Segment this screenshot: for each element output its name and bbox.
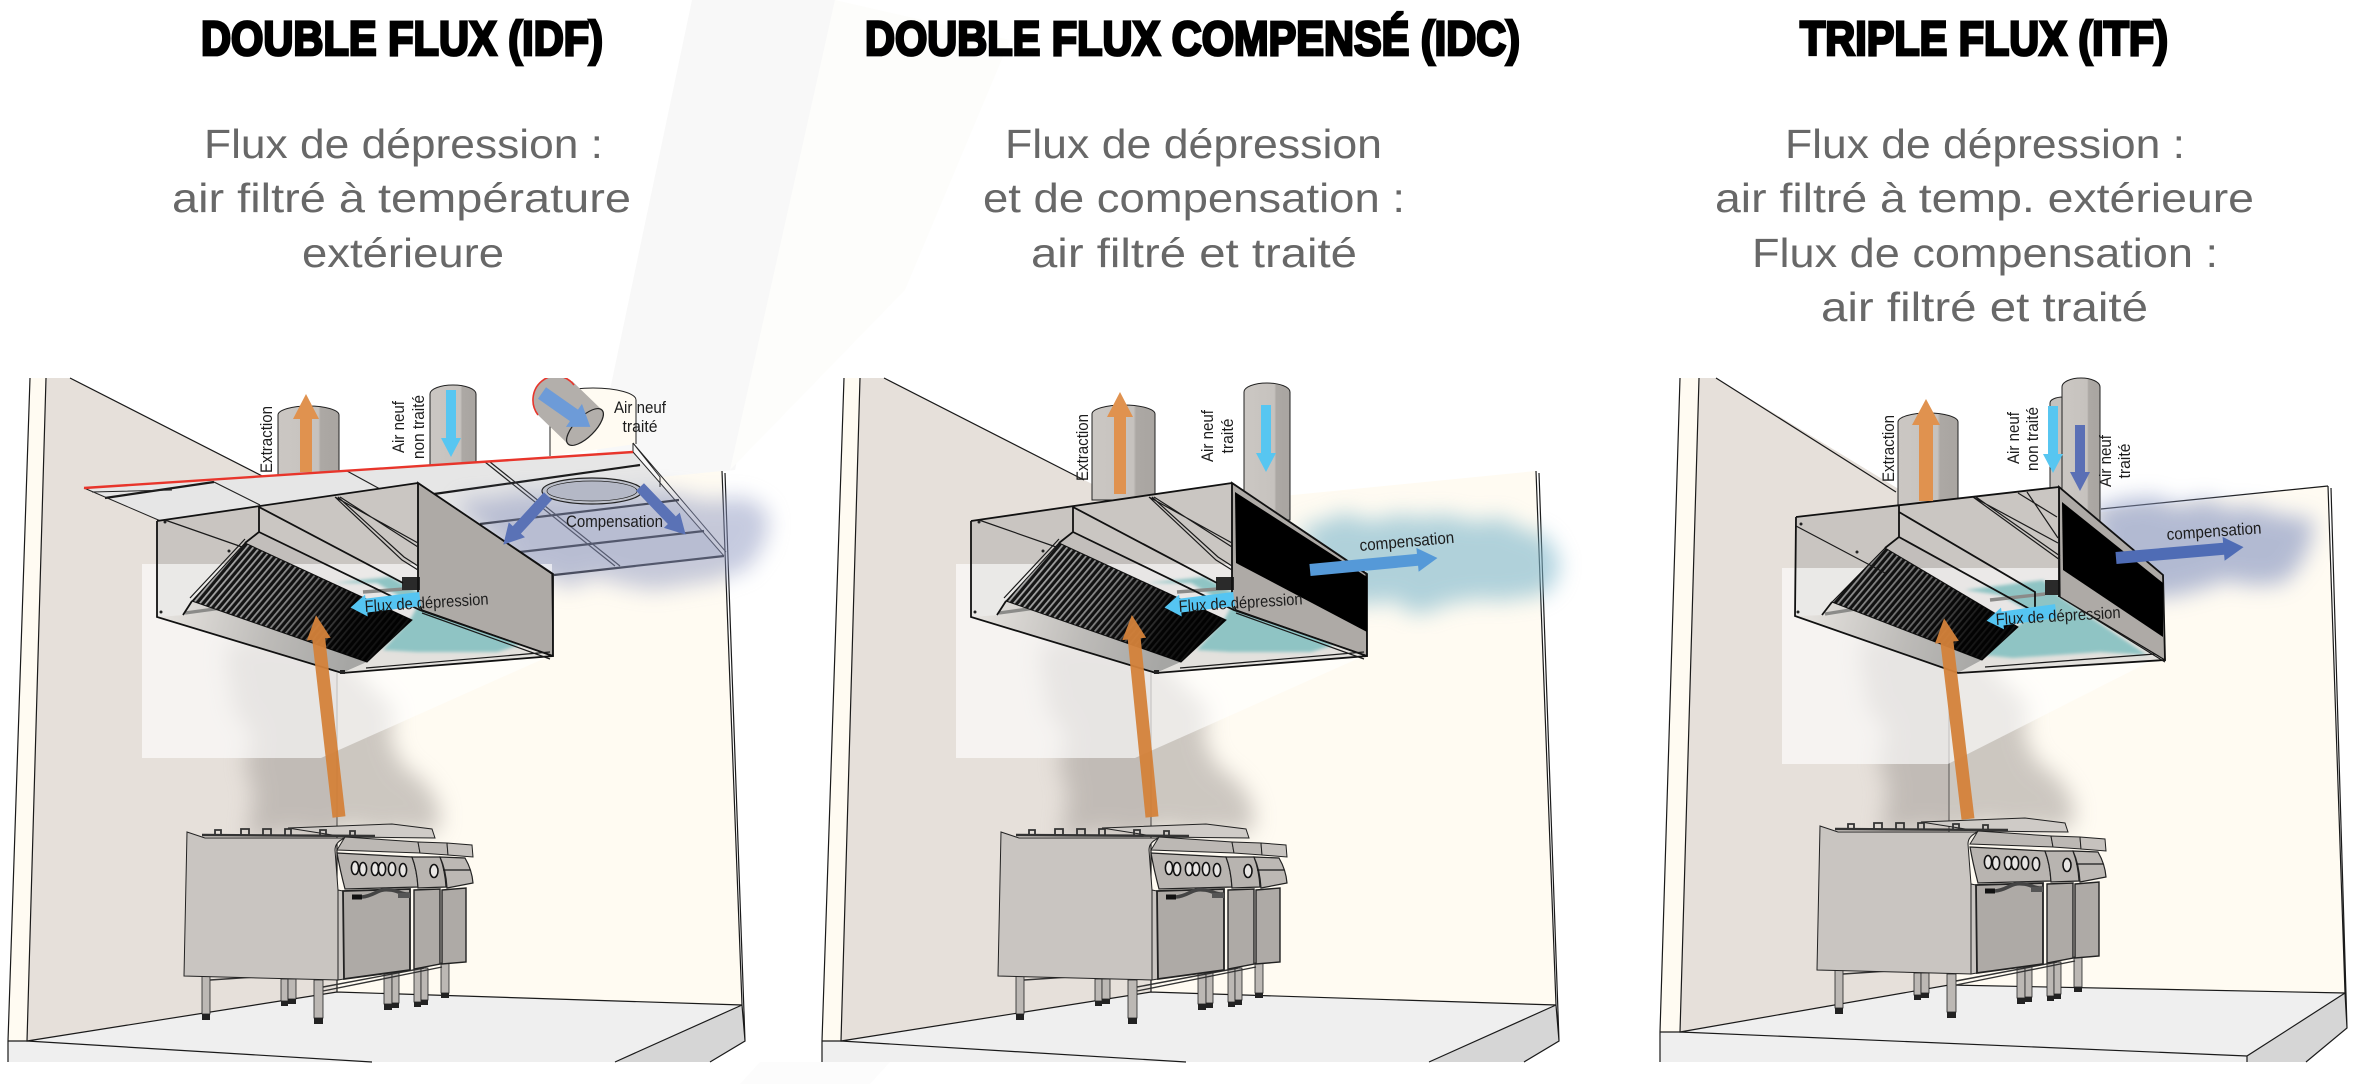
heading: triple flux ITF: TRIPLE FLUX (ITF) xyxy=(1800,13,2168,66)
arrow: rising smoke xyxy=(1120,614,1164,818)
labels IDC: compensation xyxy=(1359,529,1455,555)
arrow: depression flow xyxy=(1985,600,2058,632)
text block: ITF description xyxy=(1715,121,2254,330)
labels IDC: Air neuf xyxy=(1199,410,1217,462)
arrow: compensation right xyxy=(632,479,694,542)
angled duct with red outline xyxy=(532,378,604,446)
labels IDF: Compensation xyxy=(566,513,663,531)
red plenum edge xyxy=(84,452,633,488)
labels ITF: Air neuf xyxy=(2005,412,2023,464)
labels ITF: Flux de dépression xyxy=(1995,604,2121,629)
text block: ITF description: Flux de dépression : xyxy=(1785,121,2185,167)
compensation air cloud xyxy=(2090,503,2312,599)
cooking smoke xyxy=(1039,637,1250,834)
labels IDC: Extraction xyxy=(1074,414,1092,481)
translucent light overlay xyxy=(956,564,1366,758)
black compensation panel xyxy=(2062,502,2163,637)
labels IDF: Air neuf xyxy=(390,401,408,453)
ceiling plenum xyxy=(84,443,726,575)
text block: IDC description: air filtré et traité xyxy=(1031,230,1357,276)
text block: IDF description xyxy=(172,121,631,276)
untreated air duct xyxy=(2050,397,2063,500)
hood back faces xyxy=(971,483,1234,620)
labels ITF xyxy=(1880,407,2262,629)
black compensation panel xyxy=(1235,492,1367,632)
labels IDC: traité xyxy=(1219,418,1237,454)
text block: IDF description: extérieure xyxy=(302,230,504,276)
room walls and floor xyxy=(1660,378,2347,1062)
text block: IDF description: Flux de dépression : xyxy=(204,121,603,167)
translucent light overlay xyxy=(142,564,552,758)
stove xyxy=(1817,818,2106,1018)
arrow: compensation left xyxy=(495,489,556,552)
text block: IDF description: air filtré à température xyxy=(172,175,631,221)
treated air duct xyxy=(2062,378,2100,525)
room walls and floor xyxy=(8,378,745,1062)
text block: ITF description: air filtré et traité xyxy=(1821,284,2148,330)
hood back faces xyxy=(157,483,420,620)
labels IDF: Extraction xyxy=(258,406,276,473)
arrow: depression flow xyxy=(349,588,421,618)
text block: ITF description: air filtré à temp. extérieure xyxy=(1715,175,2254,221)
extraction duct xyxy=(1898,413,1958,505)
background light swoosh xyxy=(590,0,1010,1084)
labels ITF: Extraction xyxy=(1880,415,1898,482)
panel: double flux compensé (IDC) xyxy=(822,12,1559,1062)
hood front xyxy=(1795,487,2165,673)
extraction duct xyxy=(278,406,339,480)
room walls and floor xyxy=(822,378,1559,1062)
untreated fresh air duct xyxy=(430,385,476,470)
labels ITF: non traité xyxy=(2024,407,2042,471)
arrow: extraction xyxy=(1912,399,1940,501)
arrow: untreated air down xyxy=(2043,406,2063,473)
text block: IDC description xyxy=(983,121,1405,276)
arrow: depression flow xyxy=(1163,588,1235,618)
labels IDF xyxy=(258,395,666,616)
arrow: angled treated air xyxy=(534,382,598,438)
arrow: compensation xyxy=(2115,535,2245,570)
labels IDF: non traité xyxy=(410,395,428,459)
arrow: rising smoke xyxy=(304,614,351,818)
panel: triple flux (ITF) xyxy=(1660,13,2347,1062)
labels IDF: Flux de dépression xyxy=(364,590,489,616)
extraction duct xyxy=(1092,405,1155,500)
arrow: compensation xyxy=(1309,546,1439,582)
arrow: treated air down xyxy=(2070,425,2090,491)
translucent light overlay xyxy=(1782,568,2153,764)
arrow: extraction xyxy=(1107,392,1133,494)
cooking smoke xyxy=(225,637,436,834)
treated fresh air duct xyxy=(550,388,636,456)
arrow: extraction xyxy=(293,394,319,472)
labels IDF: Air neuf xyxy=(614,399,666,417)
labels IDC xyxy=(1074,410,1455,616)
stove xyxy=(998,824,1287,1024)
arrow: rising smoke xyxy=(1932,617,1980,820)
labels ITF: Air neuf xyxy=(2097,435,2115,487)
hood back faces xyxy=(1795,487,2060,627)
cooking smoke xyxy=(1859,633,2070,830)
arrow: untreated air down xyxy=(441,390,461,457)
hood front xyxy=(971,483,1367,674)
labels ITF: compensation xyxy=(2166,519,2262,544)
panel: double flux (IDF) xyxy=(8,13,764,1062)
heading: double flux compensé IDC: DOUBLE FLUX COMPENSÉ (IDC) xyxy=(865,12,1520,66)
compensation air cloud xyxy=(460,492,764,590)
text block: IDC description: Flux de dépression xyxy=(1005,121,1382,167)
arrow: treated air down xyxy=(1256,405,1276,472)
stove xyxy=(184,824,473,1024)
ceiling vent xyxy=(542,478,642,504)
labels ITF: traité xyxy=(2116,444,2134,478)
hood front xyxy=(157,483,553,674)
labels IDF: traité xyxy=(622,418,658,436)
text block: IDC description: et de compensation : xyxy=(983,175,1405,221)
treated air duct xyxy=(1244,383,1290,520)
text block: ITF description: Flux de compensation : xyxy=(1752,230,2218,276)
labels IDC: Flux de dépression xyxy=(1178,590,1303,616)
compensation air cloud xyxy=(1300,516,1558,607)
heading: double flux IDF: DOUBLE FLUX (IDF) xyxy=(201,13,603,66)
